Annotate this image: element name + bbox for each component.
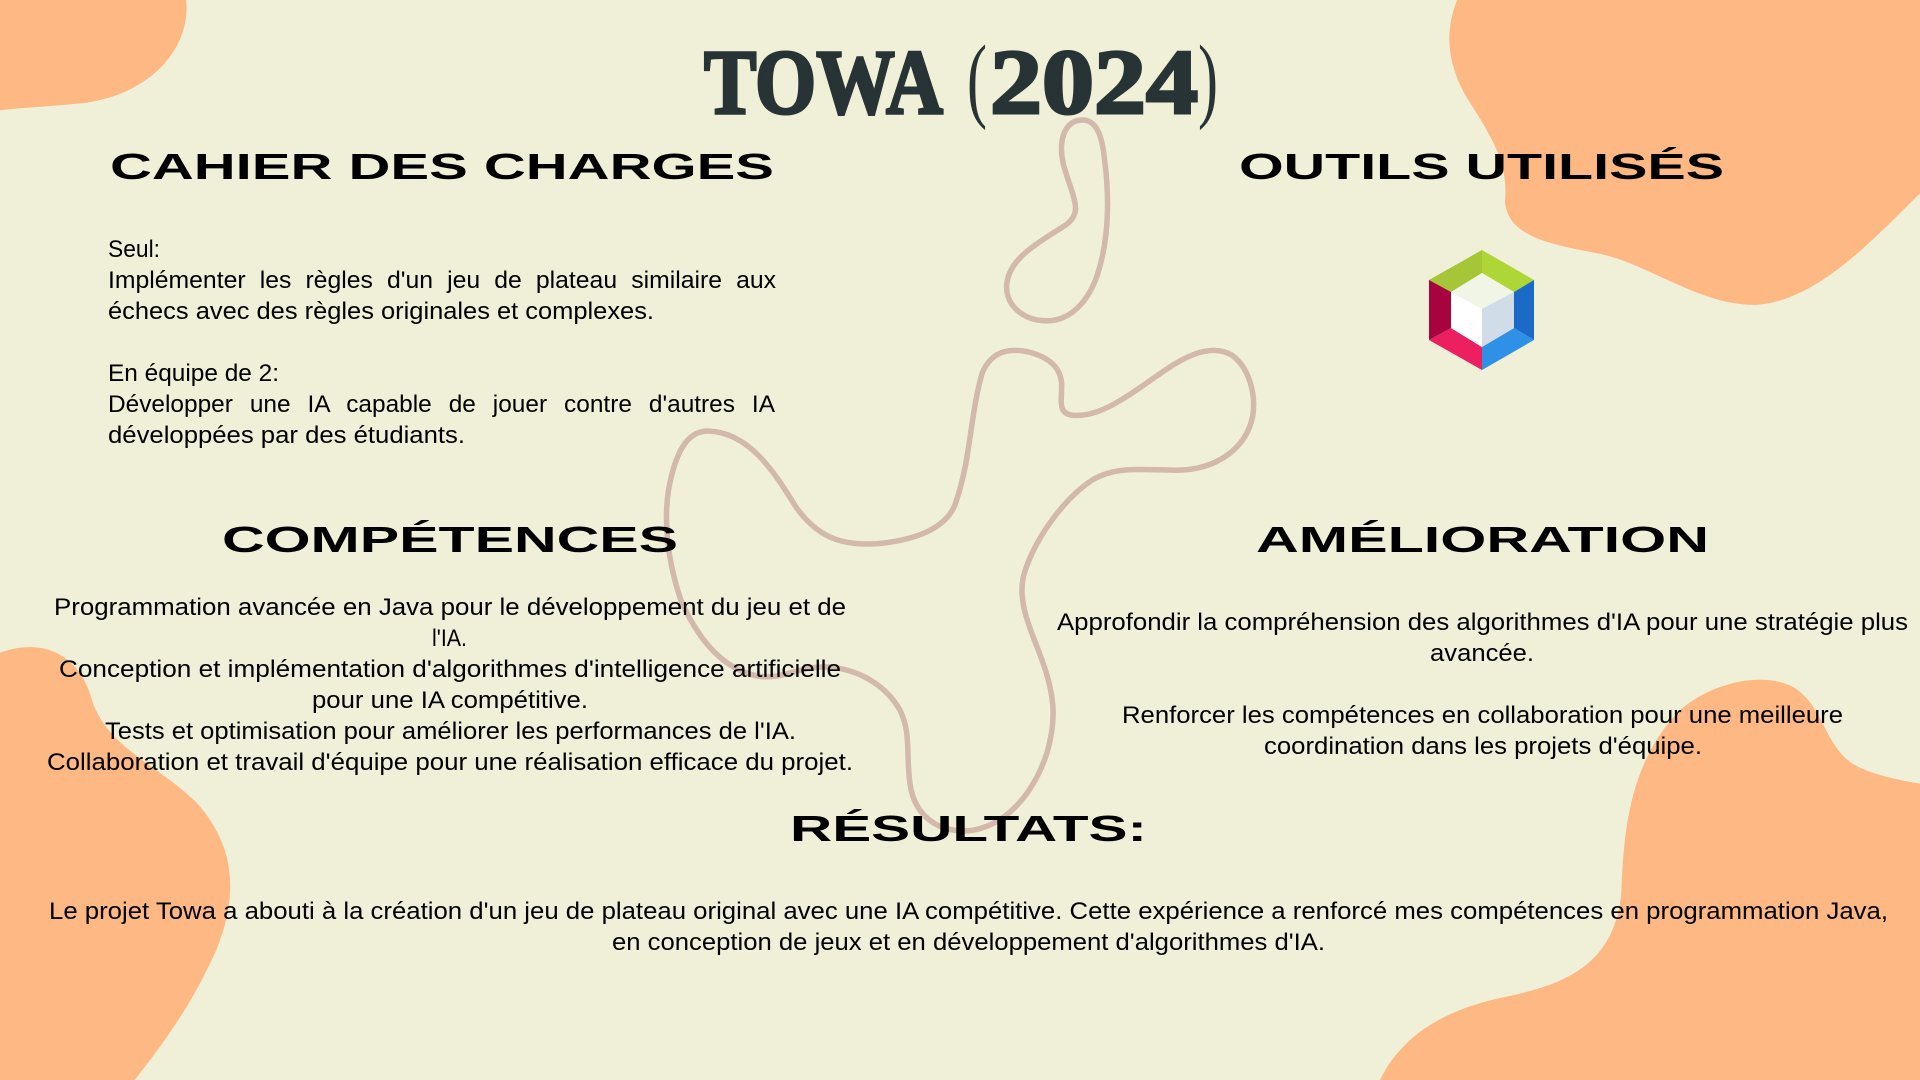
blob: top right [1449, 0, 1920, 305]
text block: résultats: Le projet Towa a abouti à la création d'un jeu de plateau original avec une IA compétitive. Cette expérience a renforcé mes compétences en programmation Java, [49, 898, 1888, 925]
text block: compétences: pour une IA compétitive. [312, 687, 588, 714]
decorative squiggle: large shape [667, 350, 1254, 831]
text block: cahier des charges: En équipe de 2: [108, 360, 279, 387]
heading: outils utilisés: OUTILS UTILISÉS [1239, 146, 1724, 187]
title: 2024 [990, 31, 1198, 133]
heading: amélioration: AMÉLIORATION [1256, 519, 1709, 560]
text block: compétences: Tests et optimisation pour améliorer les performances de l'IA. [105, 718, 796, 745]
heading: compétences: COMPÉTENCES [222, 519, 678, 560]
text block: cahier des charges: échecs avec des règles originales et complexes. [108, 298, 654, 325]
title: ) [1198, 27, 1218, 131]
text block: cahier des charges: Implémenter les règles d'un jeu de plateau similaire aux [108, 267, 776, 294]
heading: cahier des charges: CAHIER DES CHARGES [110, 146, 774, 187]
text block: amélioration: coordination dans les projets d'équipe. [1264, 733, 1702, 760]
blob: bottom right [1380, 680, 1920, 1080]
text block: cahier des charges [108, 236, 776, 449]
text block: cahier des charges: Développer une IA capable de jouer contre d'autres IA [108, 391, 775, 418]
text block: amélioration: Renforcer les compétences en collaboration pour une meilleure [1122, 702, 1843, 729]
text block: résultats: en conception de jeux et en développement d'algorithmes d'IA. [612, 929, 1325, 956]
text block: cahier des charges: Seul: [108, 236, 160, 263]
text block: compétences: Conception et implémentation d'algorithmes d'intelligence artificielle [59, 656, 841, 683]
text block: cahier des charges: développées par des étudiants. [108, 422, 465, 449]
title [704, 27, 1218, 133]
text block: amélioration: Approfondir la compréhension des algorithmes d'IA pour une stratégie plus [1057, 609, 1908, 636]
text block: compétences: Collaboration et travail d'équipe pour une réalisation efficace du projet. [47, 749, 853, 776]
title: ( [967, 27, 987, 131]
icon: NetBeans cube [1429, 250, 1534, 370]
text block: amélioration [1057, 609, 1908, 760]
text block: compétences: l'IA. [432, 625, 467, 652]
text block: compétences: Programmation avancée en Java pour le développement du jeu et de [54, 594, 846, 621]
decorative squiggle: top loop [1007, 120, 1108, 321]
text block: résultats [49, 898, 1888, 956]
blob: bottom left [0, 647, 230, 1080]
title: TOWA [704, 31, 943, 133]
text block: compétences [47, 594, 853, 776]
text block: amélioration: avancée. [1430, 640, 1534, 667]
heading: résultats: RÉSULTATS: [790, 808, 1147, 849]
blob: top left [0, 0, 187, 110]
